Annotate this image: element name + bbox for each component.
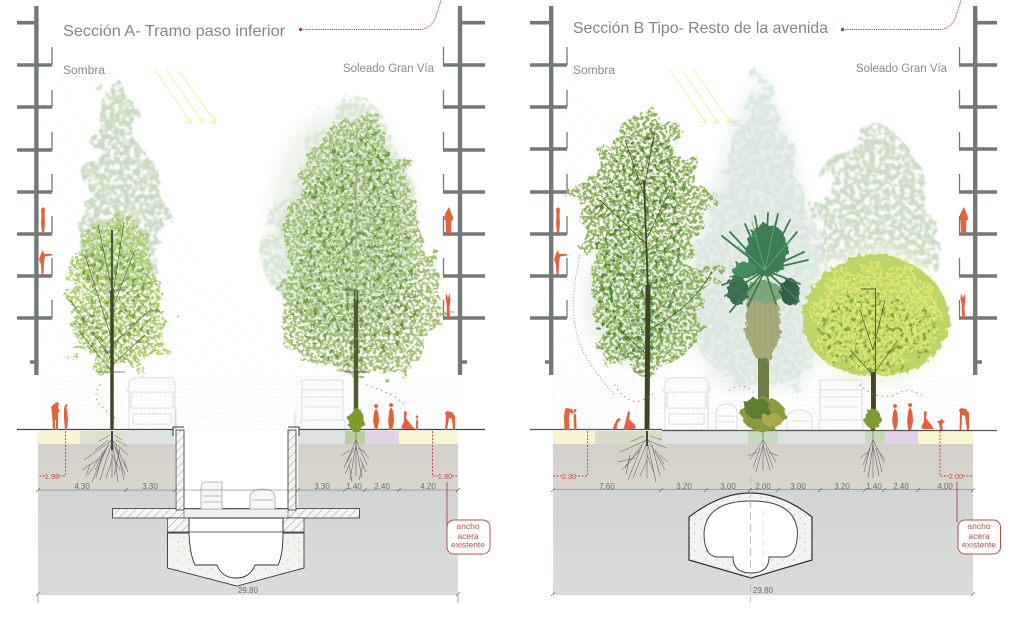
label: shade side B: Sombra — [573, 65, 616, 77]
trunk and branches B — [600, 130, 712, 430]
dotted air band B — [553, 375, 973, 430]
callout: ancho acera existente B: existente — [962, 540, 996, 550]
background rain hatch A — [38, 50, 458, 430]
title A: Sección A- Tramo paso inferior — [63, 23, 286, 40]
callout: ancho acera existente A: ancho — [456, 521, 480, 531]
dimensions A: 3.30 — [314, 482, 330, 491]
dimensions B: 3.00 — [790, 482, 806, 491]
red dimensions B: 2.00 — [949, 472, 963, 481]
dimensions B: 1.40 — [866, 482, 882, 491]
ground line A — [17, 428, 485, 430]
dimensions B: 3.20 — [676, 482, 692, 491]
label: sunny side A: Soleado Gran Vía — [343, 63, 435, 75]
underpass structure A — [112, 427, 360, 586]
tunnel B — [689, 476, 812, 602]
dimensions B: 4.00 — [937, 482, 953, 491]
background rain hatch B — [553, 50, 973, 430]
callout: ancho acera existente A: acera — [457, 531, 479, 541]
title B: Sección B Tipo- Resto de la avenida — [573, 20, 828, 37]
dimensions A: 4.20 — [420, 482, 436, 491]
dimensions A: 1.40 — [346, 482, 362, 491]
red dimensions B — [553, 431, 973, 481]
dimensions A: 3.30 — [142, 482, 158, 491]
round tree B foliage — [802, 248, 950, 430]
people B — [554, 207, 969, 430]
dimensions A: 29.80 — [238, 586, 259, 595]
dimensions B: 3.00 — [720, 482, 736, 491]
callout: ancho acera existente B: ancho — [967, 521, 991, 531]
bush trunk base A — [348, 408, 364, 432]
callout: ancho acera existente B: acera — [968, 531, 990, 541]
roots left tree A — [82, 431, 128, 482]
back tree A — [80, 78, 165, 290]
red dimensions A: 1.98 — [45, 472, 59, 481]
road deck and layers A — [38, 431, 458, 593]
building right B — [959, 6, 997, 375]
dotted leader A — [299, 0, 441, 31]
sunny tree A foliage — [262, 95, 442, 430]
building right A — [443, 6, 485, 375]
dimensions B: 29.80 — [753, 586, 774, 595]
ground line B — [530, 430, 997, 431]
dimensions B: 7.60 — [599, 482, 615, 491]
callout: ancho acera existente A — [447, 482, 490, 554]
panel: section A — [17, 0, 490, 603]
people A — [39, 207, 455, 430]
trunk and branches A — [70, 222, 150, 430]
front tree A foliage — [67, 212, 174, 430]
back tree right B — [820, 125, 940, 270]
roots round tree B — [860, 431, 885, 478]
broadleaf tree B foliage — [575, 113, 722, 430]
building left B — [530, 6, 567, 375]
balcony people A — [41, 207, 45, 233]
callout: ancho acera existente A: existente — [451, 540, 485, 550]
back poplar B — [684, 72, 828, 390]
roots broadleaf B — [618, 431, 668, 482]
dimensions B: 3.20 — [834, 482, 850, 491]
callout: ancho acera existente B — [957, 482, 1000, 554]
road vehicles B — [663, 378, 863, 430]
palm tree B — [722, 213, 808, 402]
small bush B — [865, 409, 881, 429]
label: sunny side B: Soleado Gran Vía — [856, 63, 948, 75]
dimensions A: 2.40 — [374, 482, 390, 491]
falling leaves B — [615, 385, 925, 401]
dimensions A — [36, 482, 460, 603]
red dimensions A — [38, 431, 458, 481]
dimensions B: 2.00 — [755, 482, 771, 491]
panel: section B — [530, 0, 1000, 602]
dimensions A: 4.30 — [74, 482, 90, 491]
bush median B — [741, 397, 785, 431]
building left A — [17, 6, 52, 375]
roots sunny tree A — [341, 431, 369, 482]
trunk and branches sunny A — [305, 170, 410, 430]
shadow arc B — [574, 255, 615, 395]
roots median B — [748, 431, 778, 472]
street furniture and buses A — [127, 378, 345, 430]
balcony people B — [556, 207, 560, 233]
icon: sun rays B — [670, 70, 731, 123]
dimensions B — [551, 482, 975, 596]
falling leaves A — [96, 385, 405, 420]
red dimensions B: 2.30 — [562, 472, 576, 481]
red dimensions A: 1.80 — [438, 472, 452, 481]
cars in underpass — [201, 482, 275, 509]
dotted leader B — [841, 0, 961, 31]
pavement and soil layers B — [553, 431, 973, 593]
trunk and lamp B — [850, 289, 898, 430]
dimensions B: 2.40 — [893, 482, 909, 491]
icon: sun rays A — [155, 70, 216, 123]
dotted air band A — [38, 375, 458, 430]
label: shade side A: Sombra — [63, 65, 106, 77]
